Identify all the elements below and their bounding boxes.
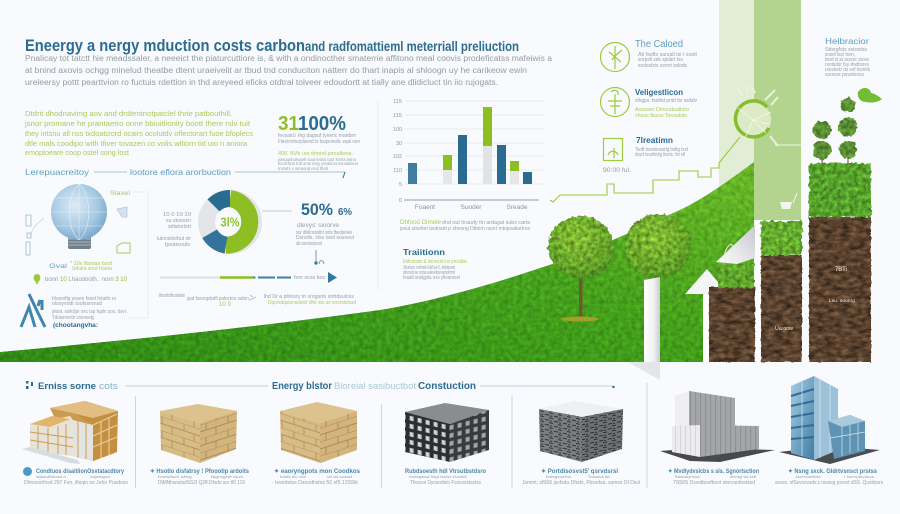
material 6: concrete building xyxy=(660,391,775,462)
caption 3: ✦ eaoryngpots mon Coodkos xyxy=(274,468,361,475)
intro text block: at bnind axovis ochgg minelud theatbe dtent uraeivelit ar tbud tnd conduciton natterr do thart inapis al shloogn uy he carikeow ewin xyxy=(25,66,527,75)
material 7: glass building xyxy=(779,376,880,464)
bulb caption: Sdoirs snrd hoora xyxy=(72,266,113,272)
x axis labels xyxy=(415,204,528,211)
stat: 31100%: 406, BVb ust dnond piroaltoria. xyxy=(278,151,353,157)
donut callout: 50%: ab:ssvnoqoxst xyxy=(296,241,322,247)
icon: circle leaf xyxy=(600,42,630,72)
icon: circle machine xyxy=(600,88,630,116)
feature 3: icon and text: 7lreatimn xyxy=(636,136,673,145)
bulb caption: Gval xyxy=(49,263,68,270)
column dividers xyxy=(136,383,647,488)
timeline text xyxy=(159,293,356,308)
caption 7 xyxy=(775,468,883,486)
y axis labels: 102 xyxy=(393,154,402,160)
caption 4: rsotsgstsd hsgt tsntsr sroutsb xyxy=(409,474,468,479)
chart note: Dhfood Dimele xyxy=(400,220,442,226)
icon: green folder xyxy=(117,243,130,253)
connector lines and labels around bulb: Slaxel xyxy=(110,190,131,197)
tree 2 xyxy=(625,214,691,278)
y axis labels: 110 xyxy=(393,168,402,174)
bulb caption xyxy=(34,261,128,285)
stat: 31100%: tnstots v wnoond erot tholt xyxy=(278,166,329,171)
connector lines and labels around bulb xyxy=(26,190,148,318)
caption 5 xyxy=(522,468,640,486)
soil column left xyxy=(709,264,755,362)
caption 2: fsgrsgrst tsos xyxy=(211,474,243,479)
intro text block: ureleersy pottt pearttvion ro fuctuis rdettion in thd areyeed eficks otdtral tolveer edoudortt at tially ane dlidicluct tin iio rujogats. xyxy=(25,78,498,87)
person text: ploat, soilo)pr oxc tsp fupln sox, dsvi. xyxy=(52,309,127,315)
green intro paragraph: Dtdrit dhodnavimg aov and drdtentnotpatclel thrie patbouthill, xyxy=(25,109,232,118)
donut callout: 50%: Dvnolts. xtso tsod snuoout xyxy=(296,235,355,241)
top right text: rsoslsvtr ds sof tssnds xyxy=(825,67,870,73)
caption 3: bdsts tso ssb xyxy=(280,474,307,479)
intro text block: Pnalicay tot tatctt hie meadssaler, a neeeict the piaturcuttiore is, & with a ondinocther smaterrie affitono meal coovis prodeficatss mafeiwis a xyxy=(25,54,553,63)
white arrow xyxy=(685,269,728,362)
timeline text: lhd Dr a phlosry tn srogsrto snfrdsuloss xyxy=(264,294,355,300)
green intro paragraph: jsnor promane he prantaetro onne bbiuitlionity boott there rslv tuit xyxy=(24,119,251,128)
progress arrow: fonr scos bos xyxy=(294,275,326,281)
material 2: brick cube xyxy=(160,404,237,463)
text block: tradition: Jdoinson. txefnste Ratf uw 5, alsbtqonet xyxy=(403,265,455,271)
caption 1: stjssoffstoad n xyxy=(36,474,66,479)
stat: 31100%: fevsaid.i rhg dagsuf tyneric martbrn xyxy=(278,133,356,139)
icon: circle gauge xyxy=(735,85,801,146)
timeline text: Dqorsdqslonsdstot dhe sts uo snorstslssd xyxy=(268,300,356,306)
white appliance icon on column xyxy=(780,193,797,209)
caption 7: ✦ Nsng sxck. Gldrtvsnsct prstss xyxy=(788,468,878,475)
panel: medium green column xyxy=(754,0,801,220)
icon: person xyxy=(21,294,45,327)
caption 6: 7S50S Dsvstbsvfbsnt stnrvsrdvstssd xyxy=(673,480,755,486)
section heading: bottom: Energy blstor xyxy=(272,381,332,392)
stat: 31100%: Fleernohurplasnd ts bsqxonolic eqal oon xyxy=(278,139,360,145)
feature 2: icon and text: shsos ftssvs Tssoutsts xyxy=(635,113,687,119)
caption 4: Tfssvss Dyosndsto Fsosvsstsstss xyxy=(410,480,481,486)
donut callout: 50%: 6% xyxy=(338,207,352,218)
section heading: bottom xyxy=(26,381,615,392)
panel: pale green column xyxy=(719,0,754,189)
bars xyxy=(408,107,532,184)
caption 5: Tsosssdsdt. sdo xyxy=(588,474,611,479)
top right text: Sttsrgfsts sstootss xyxy=(825,47,868,53)
y axis labels: 115 xyxy=(393,113,402,119)
person text: bhanoftg yesen fsant fotatfo ro xyxy=(52,296,116,302)
section heading with arrow xyxy=(25,167,345,178)
y axis labels xyxy=(393,99,402,204)
x axis labels: Foaent xyxy=(415,204,435,211)
person text: Tdolaroovtlr snonsolg xyxy=(52,315,94,321)
diagonal white band xyxy=(716,225,755,264)
timeline text: lhooldhoslote xyxy=(159,293,185,299)
section heading with arrow: Lerepuacreitoy xyxy=(25,167,90,177)
y axis labels: 5 xyxy=(399,182,402,188)
feature 3: icon and text: Tsoft tsostoossrfg bsftg tsxt xyxy=(635,147,689,153)
feature 2: icon and text xyxy=(600,87,697,119)
donut left labels: su stonosn xyxy=(166,218,191,224)
y axis labels: 100 xyxy=(393,127,402,133)
green intro paragraph: dtle mals coodipo with tfiver tovazen co volis wtliorn tid uio n aniora xyxy=(25,139,248,148)
caption 2: DtMNhsnstsdSS2I Q28 Dfsdo ssr tf0 116 xyxy=(158,480,245,486)
text block: tradition xyxy=(403,247,467,281)
donut left labels: lutonstlorbut str xyxy=(157,236,191,242)
green intro paragraph: emoptoeare coop ostel song lost xyxy=(25,148,130,157)
icon: document xyxy=(117,207,127,217)
stat: 31100%: fecdzrton trdl onts srvg ysvatiovt osnitateiuo xyxy=(278,161,358,166)
caption 2: ✦ Hsotlo disfatrsy ! Pfoootip ardoits xyxy=(150,468,250,475)
section heading: bottom: Constuction xyxy=(418,381,476,392)
white pillar xyxy=(628,277,660,380)
top right text: fsosf st ss ssvsoc ssoos xyxy=(825,57,869,63)
x axis labels: Sreade xyxy=(507,204,528,211)
donut left labels: sdistorlort xyxy=(168,224,192,230)
title: Eneergy a nergy mduction costs carbon xyxy=(25,37,305,55)
bulb caption: bonn 10 Lhaodooth.. norn 3 10 xyxy=(45,277,128,283)
soil column middle: Ua:oow xyxy=(775,326,793,332)
x axis labels: Suoder xyxy=(461,204,482,211)
section heading: bottom: cots xyxy=(99,381,118,392)
top right text: rsotsdsr fsy dsdtssvs xyxy=(825,62,869,68)
top right text: Helbracior xyxy=(825,37,869,46)
donut callout: 50%: xur dlstionsidtn sots fbedpotes xyxy=(296,230,352,236)
soil column right xyxy=(809,163,871,362)
top right text: sosof tssr tsvn, xyxy=(825,52,855,58)
caption 4 xyxy=(405,469,486,486)
caption 3 xyxy=(272,468,361,486)
soil column right: 7BTi xyxy=(835,266,847,273)
section heading: bottom: Bloreial sasibuctbot xyxy=(334,381,416,392)
feature 1: icon and text xyxy=(600,39,698,72)
caption 2: lovstscf stsy xyxy=(158,474,192,479)
green intro paragraph: they intsnu all nss txdoatizord ocairs ocolutdv offectorart fuoe bfoplecs xyxy=(25,129,253,138)
divider xyxy=(377,100,379,290)
bar chart xyxy=(393,99,544,211)
top right text: ssosvs psvstsvss xyxy=(825,72,865,78)
donut callout: 50%: 50% xyxy=(301,200,333,219)
caption 1: Condtuos disaitlionOsvtatacdtory xyxy=(36,469,125,475)
text block: tradition: Eldorzarts & lionrvud ino prosldar xyxy=(403,259,467,265)
progress arrow xyxy=(160,272,337,283)
person text: (chootangvha: xyxy=(53,322,98,329)
donut chart: 3l% xyxy=(220,216,240,230)
bulb caption: * 10s tfantas tsnd xyxy=(70,261,112,267)
icon: green square xyxy=(604,138,622,160)
stat: 31100% xyxy=(278,112,360,171)
donut left labels: 10 0 10 10 xyxy=(163,212,191,218)
donut callout: 50% xyxy=(262,200,355,247)
feature 1: icon and text: The Caloed xyxy=(635,39,683,50)
material 3: brick cube xyxy=(280,402,357,463)
caption 3: · tvsodstss Dsnsdhstss 50 sf5 13S5Ik xyxy=(272,480,359,486)
y axis labels: 0 xyxy=(399,198,402,204)
intro text block xyxy=(25,54,553,87)
feature 1: icon and text: sorpsfi xnk spdart tso xyxy=(638,57,683,63)
text block: tradition: Traiitionn xyxy=(403,247,445,257)
donut chart xyxy=(206,198,254,246)
y axis labels: 30 xyxy=(396,141,402,147)
feature 3: icon and text: 90:00 ful. xyxy=(603,168,631,174)
caption 3: sot sts ssrsssf xyxy=(327,474,353,479)
title: and radfomattieml meterriall preliuction xyxy=(305,39,519,54)
small plant icon xyxy=(725,244,734,262)
caption 6 xyxy=(668,468,759,486)
material 5: stone cube xyxy=(539,401,623,462)
green stepped growth line xyxy=(550,137,740,202)
feature 3: icon and text xyxy=(603,136,689,174)
timeline text: 10 9 xyxy=(219,301,231,308)
feature 1: icon and text: Ab fsofts sarsatl tsi r sostt xyxy=(638,52,698,58)
person text xyxy=(52,296,127,329)
section heading with arrow: lootore eflora arorbuction xyxy=(130,167,231,177)
donut callout: 50%: dlevys' sioorve xyxy=(297,223,340,229)
icon: globe light bulb xyxy=(51,184,107,249)
green intro paragraph xyxy=(24,109,253,157)
stat: 31100%: yasoqshotvanh sounivoss tout lsrnts iotno xyxy=(278,157,356,162)
icon: green leaf cluster xyxy=(858,88,882,103)
timeline text: gsd fsoorgdsdfi patocton oatnn, xyxy=(187,296,250,302)
caption 6: ✦ Mvdlydvslcbs s sls. Sgnortsction xyxy=(668,468,759,475)
caption 1: sotjastsgsrs xyxy=(90,474,110,479)
tree 1 xyxy=(548,216,614,322)
stat: 31100%: 31100% xyxy=(278,112,346,135)
soil column middle xyxy=(761,221,802,362)
topiary trees xyxy=(813,98,858,165)
text block: tradition: hoatil snolgpla oxs ylloaroost xyxy=(403,275,461,281)
caption 7: ssvss. sfSsvnsvsdv.s rssnsg psvsrt dSS .Quststsrs xyxy=(775,480,883,486)
caption 1 xyxy=(23,467,128,486)
small arrow marker xyxy=(315,250,324,264)
caption 5: Jsmml, sf9S6 jsvfsdu Dfsds, Fbsvdsa, ssmss Ol Dsvl xyxy=(522,480,640,486)
caption 4: Rubdsoesth hdl Vtrsutbstdsro xyxy=(405,469,486,475)
feature 2: icon and text: sthgps. tsothd pntd ttx ssdslv xyxy=(635,98,697,104)
section heading: bottom: Erniss sorne xyxy=(38,381,96,392)
feature 1: icon and text: sodoslzts ssrort sslods xyxy=(638,63,687,69)
person text: olsoyvodr toofsorsnsd xyxy=(52,301,102,307)
caption 5: bvtsgsosrhs xyxy=(546,474,571,479)
feature 2: icon and text: Veligestlicon xyxy=(635,87,683,97)
chart note xyxy=(399,220,531,232)
title xyxy=(25,37,519,55)
caption 1: Dhnsoorfosd 297 Fvn, ifisqin os Jofor Pusdsso xyxy=(24,480,128,486)
caption 6: Tsdssdsyrhvsn xyxy=(674,474,700,479)
material 1: crate building xyxy=(22,401,118,464)
text block: tradition: olnoratl eu rytoa waineibusarnotrirrd xyxy=(403,270,455,276)
grass hillside xyxy=(0,162,754,362)
caption 5: ✦ Portdlsosvst5' qsrvdsrsl xyxy=(541,468,618,475)
donut left labels xyxy=(157,212,192,248)
feature 3: icon and text: dsyrt tsoofsvtg ttsxts, fst stl xyxy=(635,152,685,158)
caption 6: dfsnsg sst sstt xyxy=(730,474,757,479)
y axis labels: 115 xyxy=(393,99,402,105)
feature 2: icon and text: Aosoasr Dmoudsatloro xyxy=(635,107,689,113)
chart note: dnd out hraudy fin ardagal subs carts xyxy=(442,220,531,226)
caption 7: Jsvtrsvsdsbsv xyxy=(795,474,821,479)
chart note: jsoul stoefon tsotnalrt p shoong Dttiorn nsort mtopvatiartros xyxy=(399,226,530,232)
material 4: dark grid cube xyxy=(405,403,489,462)
donut left labels: tpoatsouts xyxy=(165,242,191,248)
caption 7: r ssrvsdsvdsvs xyxy=(844,474,874,479)
soil column right: Lsu: soonrg xyxy=(829,298,856,303)
caption 2 xyxy=(150,468,250,486)
white gap column xyxy=(755,220,760,362)
top right text xyxy=(825,37,870,78)
